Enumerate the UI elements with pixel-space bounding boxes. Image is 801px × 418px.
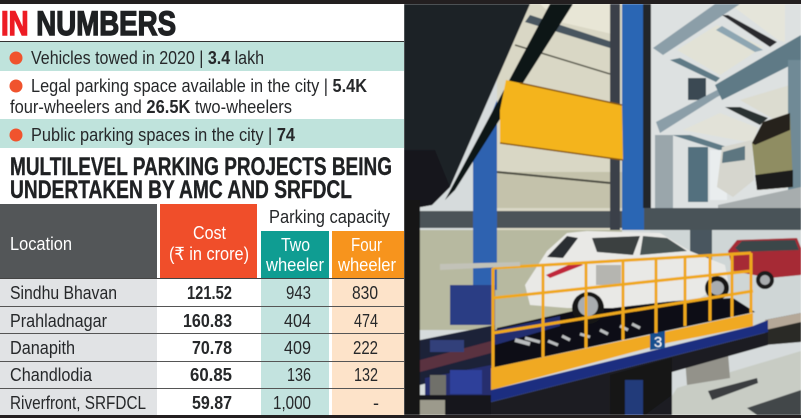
- heading: multilevel parking projects: UNDERTAKEN BY AMC AND SRFDCL: [10, 176, 352, 204]
- row: Sindhu Bhavan: 943: [286, 283, 311, 303]
- yellow platform band: [491, 313, 753, 390]
- row: Sindhu Bhavan: 830: [352, 283, 378, 303]
- photo: multilevel parking structure: [404, 4, 801, 415]
- stat row: vehicles towed: [0, 42, 404, 71]
- header: four wheeler: [332, 231, 404, 278]
- dark platform substructure: [491, 332, 768, 415]
- row: Chandlodia: 132: [354, 365, 378, 385]
- white car: [525, 231, 729, 324]
- header: four wheeler: wheeler: [337, 255, 396, 275]
- row: Danapith: 70.78: [192, 338, 232, 358]
- row: Danapith: Danapith: [10, 338, 75, 358]
- row: Chandlodia: 60.85: [190, 365, 232, 385]
- row: Chandlodia: [10, 365, 378, 385]
- stat row: legal parking space: four-wheelers and 26.5K two-wheelers: [10, 97, 292, 117]
- diagonal black beam: [445, 4, 573, 200]
- header: cost: (₹ in crore): [169, 244, 249, 264]
- row: Prahladnagar: Prahladnagar: [10, 311, 107, 331]
- machinery: [420, 285, 495, 415]
- stat row: public parking: [0, 119, 404, 148]
- row: Prahladnagar: 404: [284, 311, 311, 331]
- upper right floors: [651, 4, 801, 208]
- platform number 3: 3: [654, 334, 662, 351]
- header: cost: [160, 204, 257, 278]
- red car: [728, 238, 801, 289]
- lower bay background: [650, 208, 801, 338]
- header: two wheeler: Two: [281, 235, 310, 255]
- row: Danapith: 409: [284, 338, 311, 358]
- wall: [497, 4, 622, 334]
- row: Riverfront, SRFDCL: 1,000: [273, 393, 311, 413]
- upper car: van and SUV: [717, 113, 801, 212]
- dark overhead structure: [404, 4, 530, 210]
- row: Sindhu Bhavan: Sindhu Bhavan: [10, 283, 117, 303]
- panel: in numbers: [0, 5, 404, 148]
- platform number 3: [650, 331, 665, 351]
- top border: [0, 0, 801, 4]
- header: cost: Cost: [193, 223, 226, 243]
- row: Prahladnagar: 160.83: [183, 311, 232, 331]
- bottom border: [0, 415, 801, 418]
- grey boom: [440, 262, 520, 270]
- stat row: public parking: Public parking spaces in the city | 74: [31, 125, 295, 145]
- row: Sindhu Bhavan: 121.52: [187, 283, 232, 303]
- row: Chandlodia: Chandlodia: [10, 365, 93, 385]
- header: parking capacity: Parking capacity: [269, 207, 390, 227]
- stat row: vehicles towed: Vehicles towed in 2020 | 3.4 lakh: [31, 48, 264, 68]
- row: Prahladnagar: 474: [354, 311, 378, 331]
- table column backgrounds: [0, 278, 404, 415]
- row: Danapith: 222: [353, 338, 378, 358]
- floor: [660, 351, 801, 415]
- stat row: legal parking space: Legal parking space available in the city | 5.4K: [31, 76, 367, 96]
- row: Chandlodia: 136: [287, 365, 311, 385]
- blue columns: [473, 100, 497, 290]
- row: Riverfront, SRFDCL: 59.87: [192, 393, 232, 413]
- header: two wheeler: [261, 231, 329, 278]
- row: Sindhu Bhavan: [10, 283, 378, 303]
- row: Riverfront, SRFDCL: [10, 393, 379, 413]
- header: location: [0, 204, 157, 278]
- yellow railing: [493, 253, 753, 368]
- header: two wheeler: wheeler: [265, 255, 324, 275]
- row: Riverfront, SRFDCL: -: [373, 393, 379, 413]
- row: Danapith: [10, 338, 378, 358]
- row: Riverfront, SRFDCL: Riverfront, SRFDCL: [10, 393, 146, 413]
- row: Prahladnagar: [10, 311, 378, 331]
- table: parking projects: [0, 204, 404, 415]
- conveyor with rollers: [491, 298, 755, 368]
- title: IN NUMBERS: [1, 5, 176, 43]
- header: location: Location: [10, 234, 72, 254]
- heading: multilevel parking projects: [10, 153, 392, 204]
- header: four wheeler: Four: [351, 235, 382, 255]
- stat row: legal parking space: [10, 76, 367, 117]
- heading: multilevel parking projects: MULTILEVEL PARKING PROJECTS BEING: [10, 153, 392, 181]
- yellow panel: [500, 80, 623, 160]
